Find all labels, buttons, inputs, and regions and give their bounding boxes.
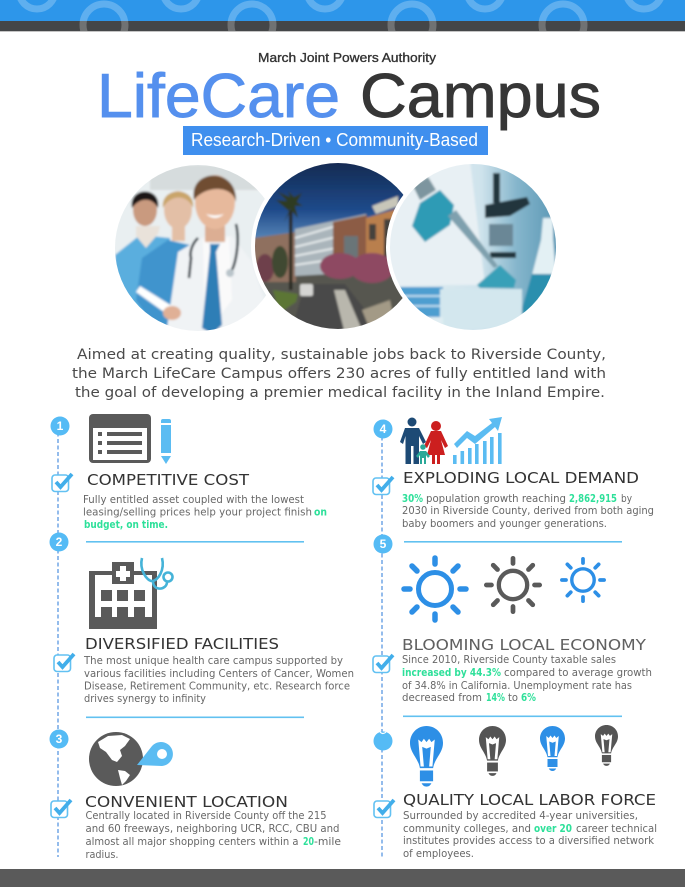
intro paragraph: Aimed at creating quality, sustainable jobs back to Riverside County, xyxy=(77,346,606,363)
description: 2030 in Riverside County, derived from both aging xyxy=(402,504,654,517)
description xyxy=(83,493,327,531)
right building xyxy=(365,208,395,256)
description: 14% xyxy=(486,692,505,704)
footer band xyxy=(0,869,685,887)
icon: four light bulbs xyxy=(410,725,618,787)
description xyxy=(83,654,354,705)
icon: form and pencil xyxy=(89,414,171,464)
icon: hospital and stethoscope xyxy=(89,558,172,629)
panel: convenient location xyxy=(51,732,341,861)
parked car xyxy=(300,284,313,296)
checkbox xyxy=(373,477,393,494)
step number 2: 2 xyxy=(56,535,63,549)
checkbox xyxy=(373,655,393,672)
photo: campus building xyxy=(255,163,404,329)
heading: QUALITY LOCAL LABOR FORCE xyxy=(403,791,656,809)
checkbox xyxy=(54,654,74,672)
gloved hand xyxy=(412,190,454,242)
description: 6% xyxy=(521,692,536,704)
icon: globe with map pin xyxy=(89,732,173,786)
description xyxy=(402,492,654,530)
photo: laboratory xyxy=(390,164,556,330)
doctor xyxy=(134,174,240,330)
panel: blooming local economy xyxy=(373,558,652,704)
microscope xyxy=(485,173,530,258)
right timeline xyxy=(374,420,392,857)
description: The most unique health care campus supported by xyxy=(83,654,344,667)
description: various facilities including Centers of Cancer, Women xyxy=(84,667,354,680)
header band xyxy=(0,0,685,32)
step number 2 xyxy=(50,532,68,552)
description: increased by 44.3% xyxy=(402,667,501,679)
flask xyxy=(532,218,556,275)
icon: family and growth chart xyxy=(400,417,502,464)
panel: quality local labor force xyxy=(374,725,657,860)
main glass building xyxy=(295,214,368,276)
description: by xyxy=(621,492,632,505)
description: Surrounded by accredited 4-year universities, xyxy=(403,809,638,822)
description: 2,862,915 xyxy=(569,493,617,505)
checkbox xyxy=(51,800,71,818)
white ring around middle photo xyxy=(251,159,425,333)
palm tree xyxy=(276,191,303,290)
second glove xyxy=(477,265,516,288)
white ring around right photo xyxy=(386,160,560,334)
road xyxy=(296,284,366,329)
female nurse xyxy=(136,191,193,335)
description: institutes provides access to a diversified network xyxy=(403,834,655,847)
blossoming trees xyxy=(320,253,394,283)
title: LifeCare xyxy=(97,62,340,131)
title: Campus xyxy=(360,62,601,131)
description: Centrally located in Riverside County off the 215 xyxy=(86,809,326,822)
step number 3 xyxy=(50,730,68,748)
left building xyxy=(254,232,296,282)
male nurse xyxy=(115,190,171,314)
description: Fully entitled asset coupled with the lowest xyxy=(83,493,305,506)
divider xyxy=(404,541,622,543)
divider xyxy=(86,716,304,718)
divider xyxy=(403,716,622,717)
description: 20 xyxy=(303,836,314,848)
step number 4: 4 xyxy=(380,422,387,436)
title xyxy=(97,62,601,131)
icon: three suns xyxy=(404,558,604,620)
description: career technical xyxy=(576,822,657,835)
step number 5 xyxy=(374,534,392,554)
description: to xyxy=(508,691,518,704)
heading: CONVENIENT LOCATION xyxy=(85,793,288,811)
description: Since 2010, Riverside County taxable sales xyxy=(402,653,616,666)
description: on xyxy=(314,506,327,518)
description: community colleges, and xyxy=(403,822,531,835)
subtitle banner xyxy=(183,126,488,155)
description: of employees. xyxy=(403,847,474,860)
description: drives synergy to infinity xyxy=(84,692,206,705)
description: almost all major shopping centers within a xyxy=(86,835,298,848)
description: over 20 xyxy=(534,823,572,835)
subtitle banner: Research-Driven • Community-Based xyxy=(191,130,478,150)
checkbox xyxy=(374,800,394,818)
divider xyxy=(86,541,304,543)
pipette xyxy=(413,177,436,200)
step number 1 xyxy=(50,416,70,436)
description: budget, on time. xyxy=(84,519,168,531)
organisation name: March Joint Powers Authority xyxy=(258,50,437,65)
sample trays xyxy=(400,287,443,317)
step number 1: 1 xyxy=(57,419,64,433)
step number 5: 5 xyxy=(380,537,387,551)
description: leasing/selling prices help your project finish xyxy=(83,506,312,518)
panel: exploding local demand xyxy=(373,417,654,530)
heading: EXPLODING LOCAL DEMAND xyxy=(403,469,639,487)
panel: competitive cost xyxy=(52,414,327,531)
description: 30% xyxy=(402,493,423,505)
photo: medical staff xyxy=(115,165,266,331)
description: Disease, Retirement Community, etc. Research force xyxy=(84,680,350,692)
left timeline xyxy=(50,416,70,857)
description: decreased from xyxy=(402,691,482,704)
checkbox xyxy=(52,474,72,492)
intro paragraph: the goal of developing a premier medical facility in the Inland Empire. xyxy=(75,384,605,401)
description xyxy=(402,653,652,704)
intro paragraph xyxy=(72,346,606,401)
description: of 34.8% in California. Unemployment rate has xyxy=(402,679,632,692)
description: baby boomers and younger generations. xyxy=(402,517,607,530)
intro paragraph: the March LifeCare Campus offers 230 acres of fully entitled land with xyxy=(72,365,606,382)
step number 3: 3 xyxy=(56,732,63,746)
description: compared to average growth xyxy=(504,666,652,679)
step number 6 marker xyxy=(374,732,392,750)
description xyxy=(86,809,341,861)
description: -mile xyxy=(314,835,341,848)
description: population growth reaching xyxy=(426,492,566,505)
heading: BLOOMING LOCAL ECONOMY xyxy=(402,636,647,654)
description xyxy=(403,809,657,860)
description: radius. xyxy=(86,848,118,861)
step number 4 xyxy=(374,420,392,438)
description: and 60 freeways, neighboring UCR, RCC, CBU and xyxy=(86,822,340,835)
heading: DIVERSIFIED FACILITIES xyxy=(85,635,279,653)
heading: COMPETITIVE COST xyxy=(87,471,250,489)
panel: diversified facilities xyxy=(54,558,354,705)
